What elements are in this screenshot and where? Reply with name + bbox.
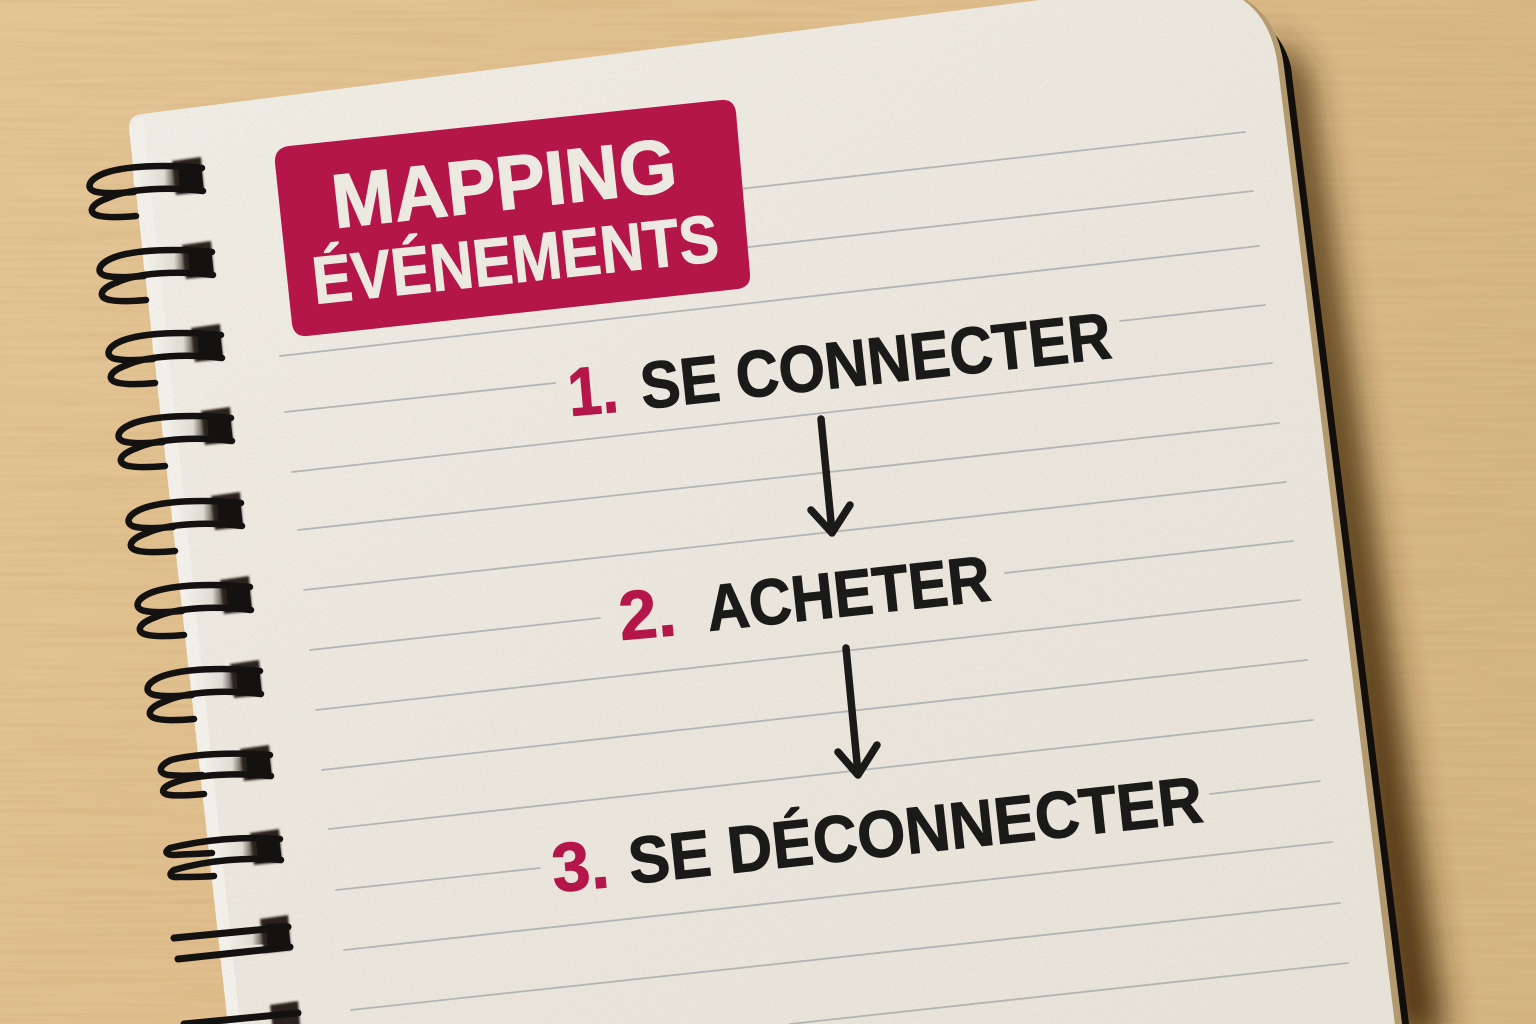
arrow 1 to 2 <box>811 419 850 533</box>
ring 3 <box>109 324 223 384</box>
step 2: acheter <box>616 542 994 655</box>
ruled lines <box>280 132 1348 1024</box>
ring 5 <box>129 492 243 552</box>
arrow 2 to 3 <box>838 648 877 775</box>
ring 6 <box>138 576 252 636</box>
ring 9 <box>167 829 282 877</box>
notebook back cover <box>1262 26 1409 1024</box>
notebook shadow on desk <box>1270 30 1445 1024</box>
step 1: se connecter: 1. <box>565 351 621 431</box>
step 3: se déconnecter: 3. <box>549 825 612 907</box>
step 3: se déconnecter: SE DÉCONNECTER <box>625 762 1206 898</box>
title line: ÉVÉNEMENTS: ÉVÉNEMENTS <box>309 201 722 319</box>
ring 8 <box>161 745 272 795</box>
ring 10 <box>174 915 291 959</box>
ring 7 <box>148 660 262 720</box>
ring 11 <box>184 1001 301 1024</box>
spiral binding <box>90 157 301 1024</box>
step 1: se connecter: SE CONNECTER <box>637 298 1115 423</box>
title line: MAPPING: MAPPING <box>328 123 681 245</box>
ring 4 <box>119 407 233 467</box>
title badge <box>275 100 750 336</box>
step 2: acheter: ACHETER <box>703 542 994 645</box>
step 2: acheter: 2. <box>616 573 679 655</box>
notebook page edges <box>1243 0 1402 1024</box>
ring 1 <box>90 157 204 217</box>
ring 2 <box>100 241 214 301</box>
